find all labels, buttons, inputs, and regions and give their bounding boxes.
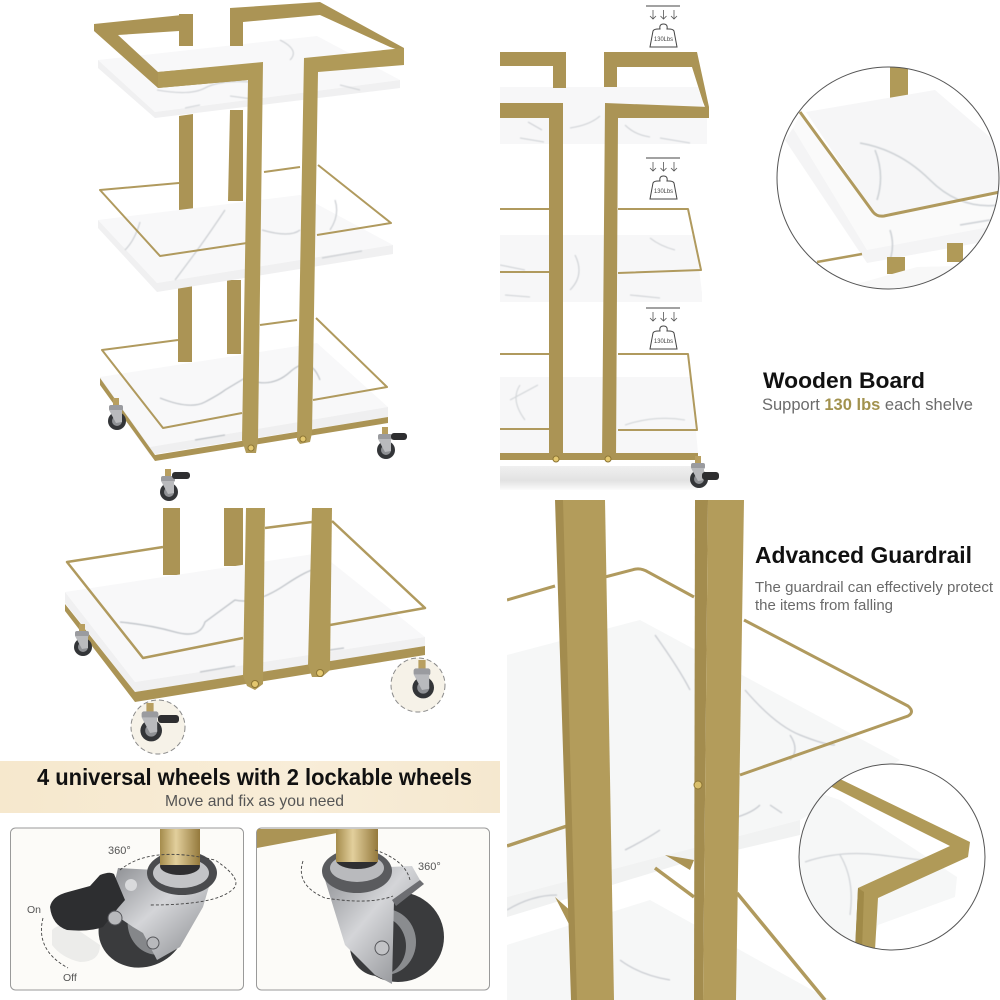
panel: swivel caster detail <box>256 828 490 990</box>
gold beam <box>257 829 337 848</box>
shelf: middle <box>98 195 393 292</box>
labels: On <box>27 904 41 916</box>
guardrails front view <box>500 209 701 430</box>
text block: wooden board <box>762 368 973 414</box>
text block: wooden board: Support 130 lbs each shelve <box>762 396 973 414</box>
callout: swivel caster <box>391 658 445 712</box>
front right post <box>297 48 404 444</box>
callout: lockable caster <box>131 700 185 754</box>
shelf: upper close-up <box>507 620 900 917</box>
rear caster <box>74 624 92 656</box>
rubber wheel <box>98 920 178 968</box>
rubber wheel <box>374 894 444 982</box>
guardrail: middle <box>100 165 391 256</box>
front left post <box>158 62 263 453</box>
shelf: bottom front view <box>500 377 698 460</box>
top frame front view <box>500 52 709 460</box>
icon: 130 lbs weight middle shelf: 130Lbs <box>654 189 673 195</box>
guardrail: bottom <box>102 318 387 428</box>
shelf: top front view <box>518 114 691 144</box>
callout: frame corner close-up circle <box>795 764 985 950</box>
icon: 130 lbs weight top shelf <box>646 6 680 47</box>
guardrail: upper <box>507 569 912 775</box>
front view caster <box>690 456 719 488</box>
callout: marble shelf close-up circle <box>770 60 1000 295</box>
shelf: lower close-up <box>65 508 425 702</box>
rear posts <box>178 8 243 362</box>
posts: lower close-up <box>243 508 332 690</box>
guardrail: lower close-up <box>67 521 425 658</box>
banner: wheels heading: 4 universal wheels with 2 lockable wheels <box>37 764 472 790</box>
panel: bottom shelf and casters <box>65 508 445 754</box>
panel: lockable caster detail <box>10 828 244 990</box>
axle bolt <box>375 941 389 955</box>
rotation arrow <box>41 854 236 968</box>
top frame right arm <box>230 2 404 52</box>
banner: wheels heading: Move and fix as you need <box>165 793 344 810</box>
post bolt <box>694 781 702 789</box>
ghost lever <box>52 925 100 962</box>
icon: 130 lbs weight top shelf: 130Lbs <box>654 37 673 43</box>
front view screws <box>553 456 611 462</box>
banner: wheels heading <box>0 761 500 813</box>
caster wheels <box>108 398 407 501</box>
brake lever <box>50 873 125 931</box>
collar <box>147 851 217 895</box>
text block: advanced guardrail: The guardrail can effectively protect <box>755 579 994 596</box>
screws <box>248 436 306 451</box>
shelf: top <box>98 36 400 118</box>
shelf: lower close-up <box>507 900 830 1000</box>
pole <box>160 829 200 863</box>
text block: advanced guardrail: the items from falling <box>755 597 893 614</box>
panel: load capacity front view <box>500 6 719 490</box>
fork <box>322 866 420 984</box>
label: 360° <box>418 861 441 873</box>
left post <box>555 500 614 1000</box>
collar <box>322 849 392 893</box>
icon: 130 lbs weight bottom shelf <box>646 308 680 349</box>
metal fork <box>116 868 209 960</box>
labels <box>27 845 131 984</box>
icon: 130 lbs weight bottom shelf: 130Lbs <box>654 339 673 345</box>
shelf: bottom with gold base <box>100 343 388 461</box>
right post <box>694 500 744 1000</box>
text block: wooden board: Wooden Board <box>763 368 925 393</box>
floor shadow <box>500 466 698 490</box>
labels: Off <box>63 972 77 984</box>
shelf: middle front view <box>500 236 676 300</box>
panel: guardrail close-up <box>507 500 985 1000</box>
text block: advanced guardrail <box>755 542 994 614</box>
top frame left arm <box>94 14 248 88</box>
connectors <box>555 855 694 930</box>
panel: full cart view <box>94 2 407 501</box>
fork side plate <box>392 880 424 906</box>
icon: 130 lbs weight middle shelf <box>646 158 680 199</box>
labels: 360° <box>108 845 131 857</box>
bolts <box>108 911 122 925</box>
rotation arrow <box>301 850 410 901</box>
text block: advanced guardrail: Advanced Guardrail <box>755 542 972 568</box>
bolts <box>252 670 324 688</box>
guardrail: lower <box>507 825 825 1000</box>
